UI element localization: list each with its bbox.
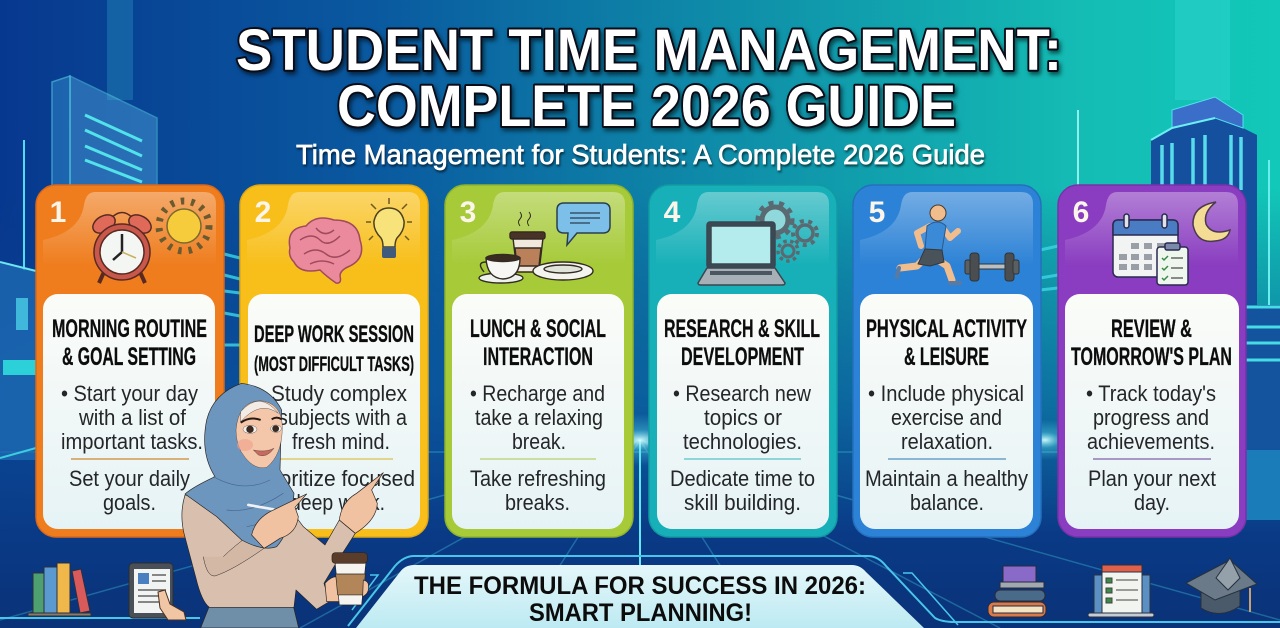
heading 5: & LEISURE (904, 343, 989, 371)
title (236, 18, 1062, 139)
banner: formula for success: SMART PLANNING! (529, 599, 752, 627)
icon: sun (159, 201, 209, 251)
heading 3: LUNCH & SOCIAL (470, 315, 606, 343)
hand pointing right (339, 473, 383, 533)
number 1: 1 (50, 196, 66, 229)
body text 4: topics or (704, 405, 782, 430)
title: COMPLETE 2026 GUIDE (337, 74, 956, 139)
bottom circuit lines (0, 556, 1280, 626)
panel: card 2 deep work (240, 185, 428, 537)
body text 4: technologies. (683, 429, 802, 454)
icon: gears (758, 203, 817, 261)
coffee cup (335, 562, 366, 605)
left sleeve (203, 533, 264, 576)
icon: speech bubble (557, 203, 610, 245)
number 2: 2 (255, 196, 271, 229)
body text 3: breaks. (505, 490, 570, 515)
body text 1: important tasks. (61, 429, 203, 454)
number 3: 3 (460, 196, 476, 229)
panel: card 5 physical activity (853, 185, 1041, 537)
heading 6 (1071, 315, 1232, 371)
icon: lunch and coffee (479, 212, 593, 283)
body text 1: Set your daily (69, 466, 190, 491)
body text 6: achievements. (1087, 429, 1215, 454)
body text 1: goals. (103, 490, 156, 515)
body text 5: relaxation. (901, 429, 993, 454)
face (236, 401, 282, 468)
icon: alarm clock (90, 211, 154, 283)
body text 6 (1086, 381, 1216, 515)
body text 1: • Start your day (61, 381, 198, 406)
heading 4: RESEARCH & SKILL (664, 315, 820, 343)
body text 4: Dedicate time to (670, 466, 815, 491)
body text 6: day. (1134, 490, 1170, 515)
body text 6: progress and (1093, 405, 1209, 430)
heading 3: INTERACTION (483, 343, 593, 371)
body text 4: skill building. (684, 490, 801, 515)
body text 1 (61, 381, 203, 515)
panel: card 3 lunch (445, 185, 633, 537)
panel: card 6 review (1058, 185, 1246, 537)
body text 5: balance. (910, 490, 984, 515)
blouse (182, 495, 355, 609)
building right (1077, 0, 1280, 520)
body text 1: with a list of (78, 405, 187, 430)
body text 5: • Include physical (868, 381, 1024, 406)
body text 5 (865, 381, 1028, 515)
body text 3: take a relaxing (475, 405, 603, 430)
heading 2: DEEP WORK SESSION (254, 321, 414, 348)
banner: formula for success (356, 565, 924, 628)
heading 1: & GOAL SETTING (62, 343, 196, 371)
body text 3 (470, 381, 606, 515)
icon: laptop checklist (1088, 565, 1154, 617)
body text 2: fresh mind. (292, 429, 390, 454)
body text 6: Plan your next (1088, 466, 1216, 491)
heading 4: DEVELOPMENT (681, 343, 804, 371)
panel: card 1 morning routine (36, 185, 224, 537)
icon: light bulb (366, 198, 412, 258)
body text 3: • Recharge and (470, 381, 605, 406)
light stripes between cards (224, 246, 1058, 345)
building left (0, 0, 157, 460)
hand pointing left (252, 494, 307, 548)
headscarf (185, 383, 294, 548)
heading 5 (866, 315, 1027, 371)
icon: moon (1193, 202, 1230, 241)
trousers (201, 606, 299, 628)
heading 1 (52, 315, 207, 371)
icon: graduation cap (1186, 558, 1257, 614)
body text 6: • Track today's (1086, 381, 1216, 406)
body text 4: • Research new (673, 381, 811, 406)
number 6: 6 (1073, 196, 1089, 229)
icon: books (28, 563, 91, 616)
heading 1: MORNING ROUTINE (52, 315, 207, 343)
icon: laptop (698, 222, 785, 285)
body text 2 (254, 381, 415, 515)
illustration: presenter with coffee (182, 383, 383, 628)
body text 2: subjects with a (278, 405, 408, 430)
panel: card 4 research (649, 185, 837, 537)
heading 3 (470, 315, 606, 371)
icon: brain (289, 218, 362, 283)
icon: dumbbell (965, 253, 1019, 281)
body text 3: Take refreshing (470, 466, 606, 491)
body text 5: exercise and (891, 405, 1002, 430)
icon: book stack (988, 566, 1046, 617)
icon: runner (897, 205, 960, 283)
heading 2 (254, 321, 414, 376)
pen (248, 505, 273, 509)
number 5: 5 (869, 196, 885, 229)
banner: formula for success: THE FORMULA FOR SUCCESS IN 2026: (414, 572, 866, 600)
body text 5: Maintain a healthy (865, 466, 1028, 491)
body text 3: break. (512, 429, 566, 454)
heading 5: PHYSICAL ACTIVITY (866, 315, 1027, 343)
body text 2: deep work. (290, 490, 385, 515)
coffee hand (325, 577, 343, 602)
heading 2: (MOST DIFFICULT TASKS) (254, 353, 414, 376)
title: STUDENT TIME MANAGEMENT: (236, 18, 1062, 83)
icon: checklist clipboard (1157, 243, 1188, 285)
body text 4 (670, 381, 815, 515)
body text 2: • Study complex (258, 381, 407, 406)
heading 4 (664, 315, 820, 371)
number 4: 4 (664, 196, 681, 229)
icon: calendar (1113, 214, 1178, 277)
body text 2: Prioritize focused (254, 466, 415, 491)
heading 6: REVIEW & (1111, 315, 1192, 343)
icon: tablet with hand (129, 563, 186, 620)
subtitle: Time Management for Students: A Complete 2026 Guide (296, 139, 985, 170)
